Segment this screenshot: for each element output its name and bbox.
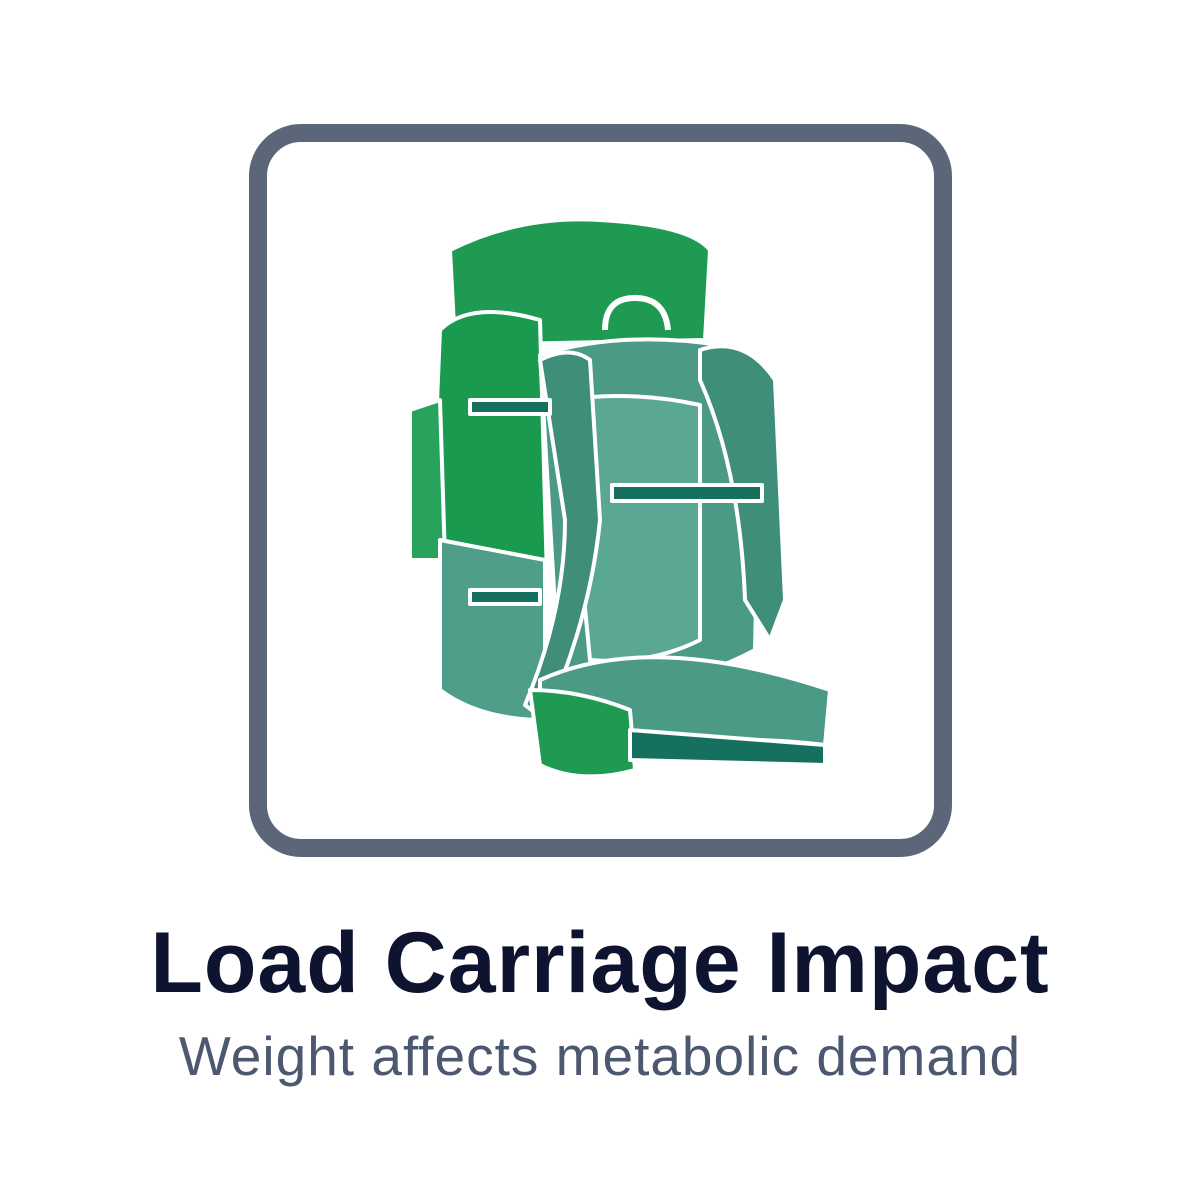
title: Load Carriage Impact bbox=[150, 915, 1050, 1011]
icon: backpack bbox=[412, 221, 828, 774]
icon frame bbox=[249, 124, 952, 857]
subtitle: Weight affects metabolic demand bbox=[179, 1025, 1021, 1087]
